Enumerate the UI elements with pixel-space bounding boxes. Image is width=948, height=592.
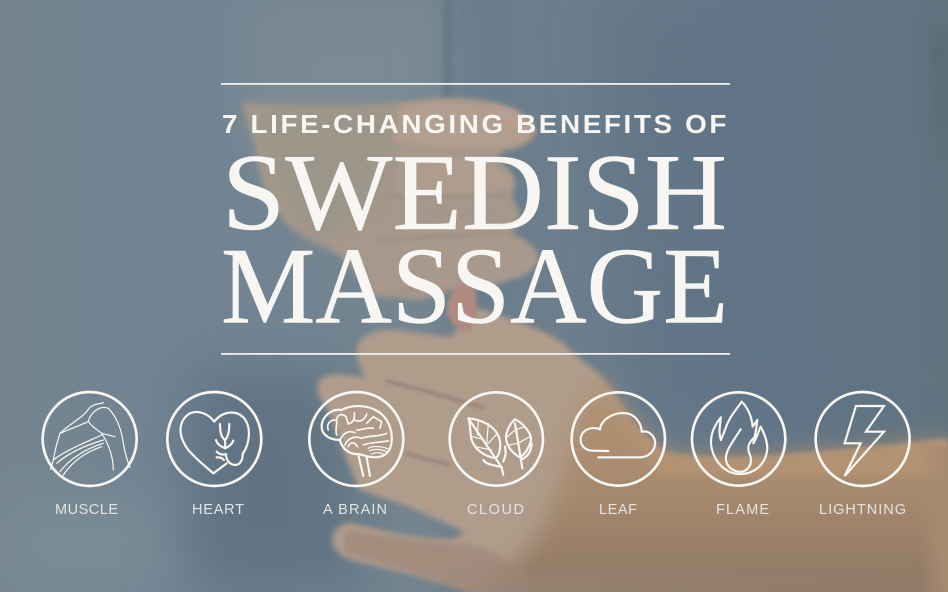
benefit: leaf (cloud drawing) — [572, 392, 665, 518]
label: a brain: A BRAIN — [323, 502, 387, 518]
label: leaf: LEAF — [599, 502, 637, 518]
top rule — [221, 83, 730, 85]
benefit: heart — [167, 392, 261, 518]
finger gaps and nails — [375, 196, 505, 290]
heading: Swedish: SWEDISH — [222, 132, 727, 253]
icon: leaves — [450, 392, 543, 486]
hand creases — [385, 381, 485, 465]
title block — [221, 83, 730, 355]
bottom edge of the arm — [559, 584, 935, 592]
lower hand and arm — [318, 308, 948, 592]
icon: lightning — [816, 392, 910, 486]
label: cloud: CLOUD — [467, 502, 524, 518]
icon: cloud — [572, 392, 665, 486]
right edge of the arm — [918, 446, 948, 592]
icon: muscle — [43, 392, 137, 486]
benefit: cloud (leaf drawing) — [450, 392, 543, 518]
thumb nail — [447, 284, 477, 332]
label: muscle: MUSCLE — [55, 502, 118, 518]
icon: heart — [167, 392, 261, 486]
benefit: lightning — [816, 392, 910, 518]
upper hand — [243, 97, 538, 300]
benefit: flame — [692, 392, 785, 518]
icon: flame — [692, 392, 785, 486]
benefit: brain — [309, 392, 403, 518]
heading: Massage: MASSAGE — [221, 226, 728, 346]
label: flame: FLAME — [716, 502, 769, 518]
benefit: muscle — [43, 392, 137, 518]
label: lightning: LIGHTNING — [819, 502, 906, 518]
label: heart: HEART — [192, 502, 244, 518]
bottom rule — [221, 353, 730, 355]
subtitle: 7 LIFE-CHANGING BENEFITS OF — [222, 111, 729, 139]
icon: brain — [309, 392, 403, 486]
